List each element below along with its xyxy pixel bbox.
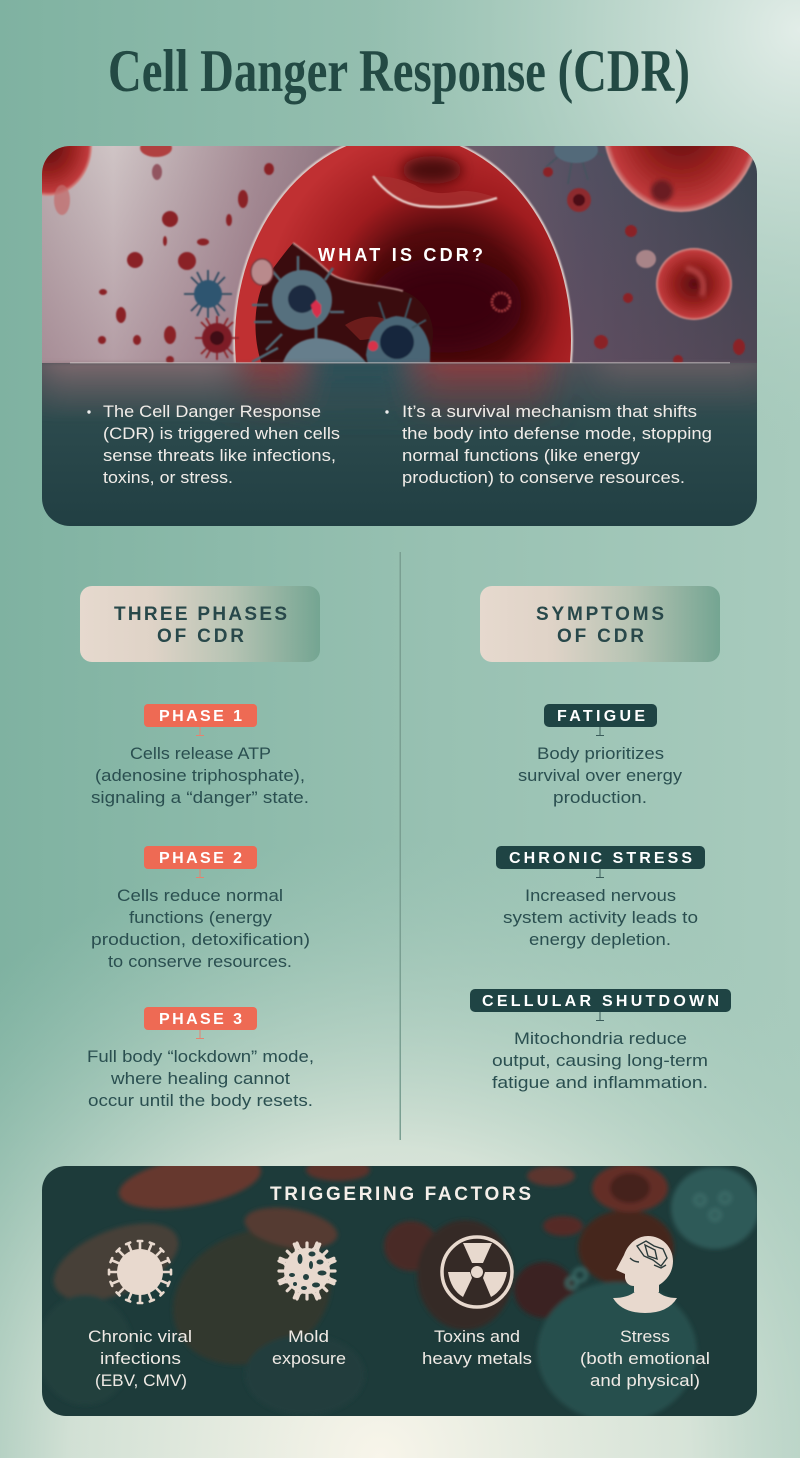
symptom: cellular shutdown	[470, 989, 731, 1092]
text: left bullet	[87, 403, 340, 487]
phase 2: Cells reduce normal	[117, 887, 283, 905]
symptom: chronic stress: system activity leads to	[503, 909, 698, 927]
symptom: chronic stress: Increased nervous	[525, 887, 676, 905]
heading: what is CDR: WHAT IS CDR?	[318, 245, 483, 265]
text: right bullet: normal functions (like energy	[402, 447, 641, 465]
heading pill: three phases	[80, 586, 320, 662]
phase 1: signaling a “danger” state.	[91, 789, 309, 807]
text: left bullet: toxins, or stress.	[103, 469, 233, 487]
factor: mold exposure: Mold	[288, 1328, 329, 1346]
panel: triggering factors	[42, 1166, 757, 1416]
factor: stress: (both emotional	[580, 1350, 710, 1368]
illustration: blood cells and viruses	[42, 146, 757, 363]
phase 3: PHASE 3	[159, 1011, 242, 1028]
phase 2: functions (energy	[129, 909, 273, 927]
factor: mold exposure	[272, 1243, 346, 1368]
phase 1: PHASE 1	[159, 708, 242, 725]
text: left bullet: sense threats like infections,	[103, 447, 336, 465]
panel: three phases	[80, 586, 320, 1110]
text: right bullet: It’s a survival mechanism that shifts	[402, 403, 697, 421]
phase 1: Cells release ATP	[130, 745, 271, 763]
icon: virus	[109, 1241, 171, 1303]
symptom: chronic stress: energy depletion.	[529, 931, 671, 949]
symptom: fatigue: Body prioritizes	[537, 745, 664, 763]
phase 2: PHASE 2	[159, 850, 242, 867]
heading: triggering factors: TRIGGERING FACTORS	[270, 1184, 531, 1205]
panel: symptoms	[470, 586, 731, 1092]
factor: chronic viral infections: (EBV, CMV)	[95, 1372, 187, 1390]
text: left bullet: The Cell Danger Response	[103, 403, 321, 421]
symptom: fatigue: FATIGUE	[557, 708, 645, 725]
phase 3	[87, 1007, 314, 1110]
symptom: fatigue	[518, 704, 683, 807]
factor: stress: Stress	[620, 1328, 670, 1346]
symptom: chronic stress: CHRONIC STRESS	[509, 850, 692, 867]
background illustration	[52, 1166, 757, 1416]
panel: what is CDR	[42, 146, 757, 526]
icon: radiation	[442, 1237, 512, 1307]
phase 2: production, detoxification)	[91, 931, 310, 949]
factor: stress	[580, 1236, 710, 1390]
factor: chronic viral infections: Chronic viral	[88, 1328, 192, 1346]
text: right bullet: production) to conserve resources.	[402, 469, 685, 487]
symptom: chronic stress	[496, 846, 705, 949]
small particles	[98, 163, 745, 365]
other red cells	[42, 146, 754, 321]
heading pill: symptoms: OF CDR	[557, 626, 644, 647]
text: left bullet: (CDR) is triggered when cells	[103, 425, 340, 443]
viruses	[184, 137, 604, 365]
phase 1: (adenosine triphosphate),	[95, 767, 305, 785]
factor: toxins	[422, 1237, 532, 1368]
phase 3: where healing cannot	[110, 1070, 290, 1088]
phase 3: Full body “lockdown” mode,	[87, 1048, 314, 1066]
symptom: cellular shutdown: CELLULAR SHUTDOWN	[482, 993, 719, 1010]
symptom: cellular shutdown: output, causing long-term	[492, 1052, 708, 1070]
heading pill: three phases: OF CDR	[157, 626, 244, 647]
symptom: cellular shutdown: fatigue and inflammation.	[492, 1074, 708, 1092]
phase 1	[91, 704, 309, 807]
big red blood cell	[232, 146, 574, 363]
icon: mold	[279, 1243, 335, 1299]
symptom: fatigue: production.	[553, 789, 647, 807]
heading pill: symptoms: SYMPTOMS	[536, 604, 664, 625]
factor: toxins: Toxins and	[434, 1328, 520, 1346]
factor: chronic viral infections: infections	[100, 1350, 181, 1368]
factor: chronic viral infections	[88, 1241, 192, 1390]
factor: stress: and physical)	[590, 1372, 700, 1390]
symptom: cellular shutdown: Mitochondria reduce	[514, 1030, 687, 1048]
symptom: fatigue: survival over energy	[518, 767, 683, 785]
icon: head	[613, 1236, 677, 1313]
phase 2	[91, 846, 310, 971]
text: right bullet: the body into defense mode, stopping	[402, 425, 712, 443]
heading pill: three phases: THREE PHASES	[114, 604, 287, 625]
heading pill: symptoms	[480, 586, 720, 662]
factor: toxins: heavy metals	[422, 1350, 532, 1368]
factor: mold exposure: exposure	[272, 1350, 346, 1368]
phase 2: to conserve resources.	[108, 953, 292, 971]
text: right bullet	[385, 403, 712, 487]
phase 3: occur until the body resets.	[88, 1092, 313, 1110]
reflection fade	[42, 360, 757, 425]
